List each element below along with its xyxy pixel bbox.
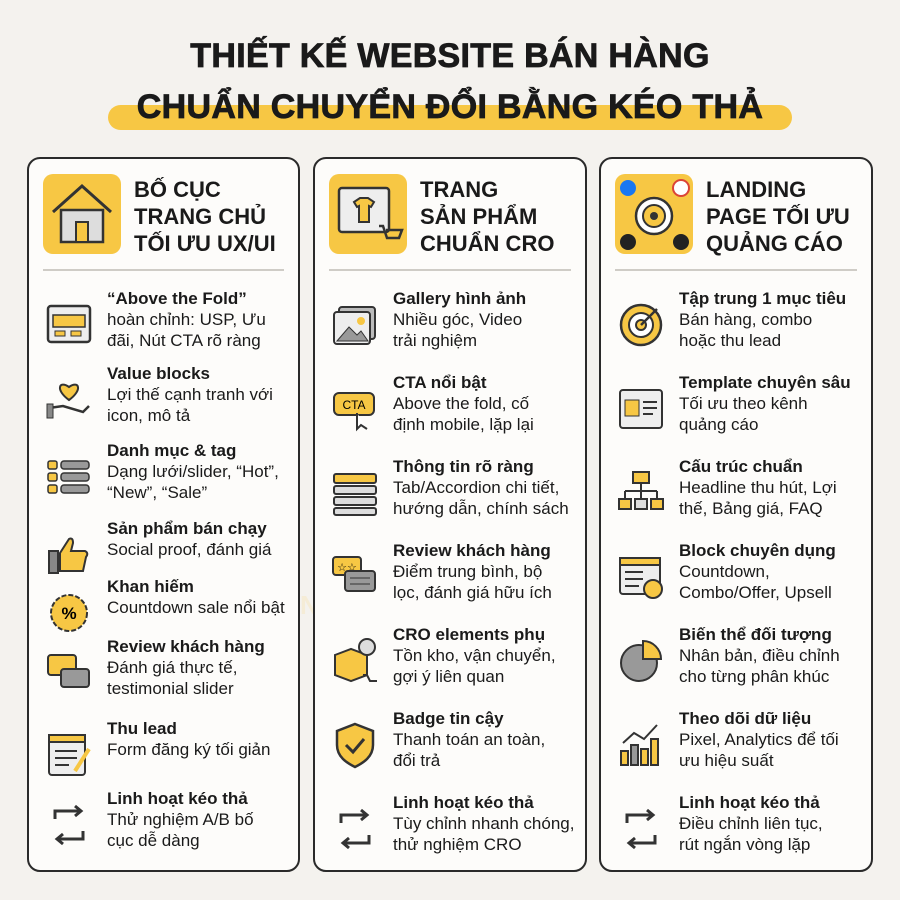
item: scarcity xyxy=(50,577,285,632)
item: drag drop: Linh hoạt kéo thả xyxy=(393,793,534,812)
item: gallery: Gallery hình ảnh xyxy=(393,289,526,308)
item: dedicated block xyxy=(619,541,836,602)
watermark: Nhanh - Chuẩn - Đẹp xyxy=(300,590,576,620)
header text: TỐI ƯU UX/UI xyxy=(134,231,276,256)
panel: product page: Điểm trung bình, bộ xyxy=(393,562,542,581)
item: info xyxy=(333,457,569,518)
title highlight xyxy=(108,105,792,130)
item: focus: Tập trung 1 mục tiêu xyxy=(679,289,846,308)
panel: product page: CTA xyxy=(342,398,366,412)
item: drag drop xyxy=(626,793,823,854)
item: lead: Thu lead xyxy=(107,719,177,738)
panel: product page: ☆☆ xyxy=(337,562,357,574)
item: CRO elements xyxy=(334,625,556,686)
panel: landing page: cho từng phân khúc xyxy=(679,667,829,686)
item: template: Template chuyên sâu xyxy=(679,373,851,392)
panel: landing page: Bán hàng, combo xyxy=(679,310,812,329)
panel: landing page: hoặc thu lead xyxy=(679,331,781,350)
panel: product page: Nhiều góc, Video xyxy=(393,310,522,329)
panel: landing page: Tối ưu theo kênh xyxy=(679,394,808,413)
panel: landing page: Countdown, xyxy=(679,562,770,581)
panel: product page: trải nghiệm xyxy=(393,331,477,350)
panel: product page: đổi trả xyxy=(393,751,440,770)
item: scarcity: Khan hiếm xyxy=(107,577,194,596)
panel: product page: Above the fold, cố xyxy=(393,394,529,413)
item: trust badge xyxy=(336,709,545,770)
panel: homepage layout: cục dễ dàng xyxy=(107,831,200,850)
item: drag drop: Linh hoạt kéo thả xyxy=(679,793,820,812)
item: pie xyxy=(620,625,840,686)
item: reviews xyxy=(332,541,552,602)
item: categories: Danh mục & tag xyxy=(107,441,236,460)
panel: landing page: ưu hiệu suất xyxy=(679,751,774,770)
panel: product page: hướng dẫn, chính sách xyxy=(393,499,569,518)
panel: product page: thử nghiệm CRO xyxy=(393,835,522,854)
item: best sellers xyxy=(48,519,272,574)
item: trust badge: Badge tin cậy xyxy=(393,709,504,728)
header text xyxy=(706,177,850,256)
item: CTA: CTA nổi bật xyxy=(393,373,486,392)
panel: product page xyxy=(313,157,587,872)
panel: homepage layout: Countdown sale nổi bật xyxy=(107,598,285,617)
header text: LANDING xyxy=(706,177,806,202)
item: reviews: Review khách hàng xyxy=(107,637,265,656)
item: reviews: Review khách hàng xyxy=(393,541,551,560)
item: value blocks xyxy=(46,364,273,425)
panel: homepage layout: Lợi thế cạnh tranh với xyxy=(107,385,273,404)
title line 1: THIẾT KẾ WEBSITE BÁN HÀNG xyxy=(190,37,710,75)
item: template xyxy=(619,373,851,434)
panel: product page: Tồn kho, vận chuyển, xyxy=(393,646,556,665)
header text xyxy=(420,177,554,256)
item: info: Thông tin rõ ràng xyxy=(393,457,534,476)
item: focus xyxy=(620,289,846,350)
panel: homepage layout: icon, mô tả xyxy=(107,406,190,425)
item: best sellers: Sản phẩm bán chạy xyxy=(107,519,267,538)
panel: homepage layout: % xyxy=(61,604,77,623)
panel: landing page xyxy=(599,157,873,872)
panel: landing page: Headline thu hút, Lợi xyxy=(679,478,837,497)
panel: landing page: quảng cáo xyxy=(679,415,758,434)
panel: homepage layout: Form đăng ký tối giản xyxy=(107,740,270,759)
panel: product page: Tùy chỉnh nhanh chóng, xyxy=(393,814,574,833)
panel: product page: định mobile, lặp lại xyxy=(393,415,534,434)
header icon: target with channels xyxy=(615,174,693,254)
panel: homepage layout: Đánh giá thực tế, xyxy=(107,658,237,677)
item: data: Theo dõi dữ liệu xyxy=(679,709,811,728)
item: structure xyxy=(618,457,837,518)
panel: homepage layout: testimonial slider xyxy=(107,679,234,698)
item: categories xyxy=(47,441,279,502)
item: data xyxy=(620,709,839,770)
header text: PAGE TỐI ƯU xyxy=(706,204,850,229)
title line 2: CHUẨN CHUYỂN ĐỔI BẰNG KÉO THẢ xyxy=(137,88,763,126)
panel: product page: Tab/Accordion chi tiết, xyxy=(393,478,559,497)
panel: product page: gợi ý liên quan xyxy=(393,667,504,686)
item: structure: Cấu trúc chuẩn xyxy=(679,457,803,476)
panel: landing page: Nhân bản, điều chỉnh xyxy=(679,646,840,665)
item: CRO elements: CRO elements phụ xyxy=(393,625,545,644)
panel: product page: Thanh toán an toàn, xyxy=(393,730,545,749)
header text xyxy=(134,177,276,256)
header text: QUẢNG CÁO xyxy=(706,231,843,256)
panel: homepage layout: Dạng lưới/slider, “Hot”, xyxy=(107,462,279,481)
header text: SẢN PHẨM xyxy=(420,204,537,229)
panel: landing page: Pixel, Analytics để tối xyxy=(679,730,839,749)
header text: TRANG xyxy=(420,177,498,202)
item: drag drop xyxy=(340,793,574,854)
header text: TRANG CHỦ xyxy=(134,204,266,229)
item: CTA xyxy=(333,373,534,434)
header text: CHUẨN CRO xyxy=(420,231,554,256)
panel: landing page: Combo/Offer, Upsell xyxy=(679,583,832,602)
item: value blocks: Value blocks xyxy=(107,364,210,383)
panel: homepage layout: Social proof, đánh giá xyxy=(107,540,271,559)
item: gallery xyxy=(333,289,526,350)
item: above the fold: “Above the Fold” xyxy=(107,289,247,308)
item: reviews xyxy=(47,637,265,698)
header icon: product page xyxy=(329,174,407,254)
header text: BỐ CỤC xyxy=(134,177,221,202)
panel: homepage layout xyxy=(27,157,300,872)
header icon: house xyxy=(43,174,121,254)
item: lead xyxy=(48,719,270,776)
item: drag drop xyxy=(54,789,254,850)
panel: landing page: thế, Bảng giá, FAQ xyxy=(679,499,823,518)
item: pie: Biến thể đối tượng xyxy=(679,625,832,644)
item: above the fold xyxy=(46,289,266,350)
item: dedicated block: Block chuyên dụng xyxy=(679,541,836,560)
panel: homepage layout: hoàn chỉnh: USP, Ưu xyxy=(107,310,266,329)
panel: product page: lọc, đánh giá hữu ích xyxy=(393,583,552,602)
panel: landing page: Điều chỉnh liên tục, xyxy=(679,814,823,833)
panel: homepage layout: Thử nghiệm A/B bố xyxy=(107,810,254,829)
item: drag drop: Linh hoạt kéo thả xyxy=(107,789,248,808)
panel: homepage layout: “New”, “Sale” xyxy=(107,483,207,502)
panel: landing page: rút ngắn vòng lặp xyxy=(679,835,810,854)
panel: homepage layout: đãi, Nút CTA rõ ràng xyxy=(107,331,261,350)
